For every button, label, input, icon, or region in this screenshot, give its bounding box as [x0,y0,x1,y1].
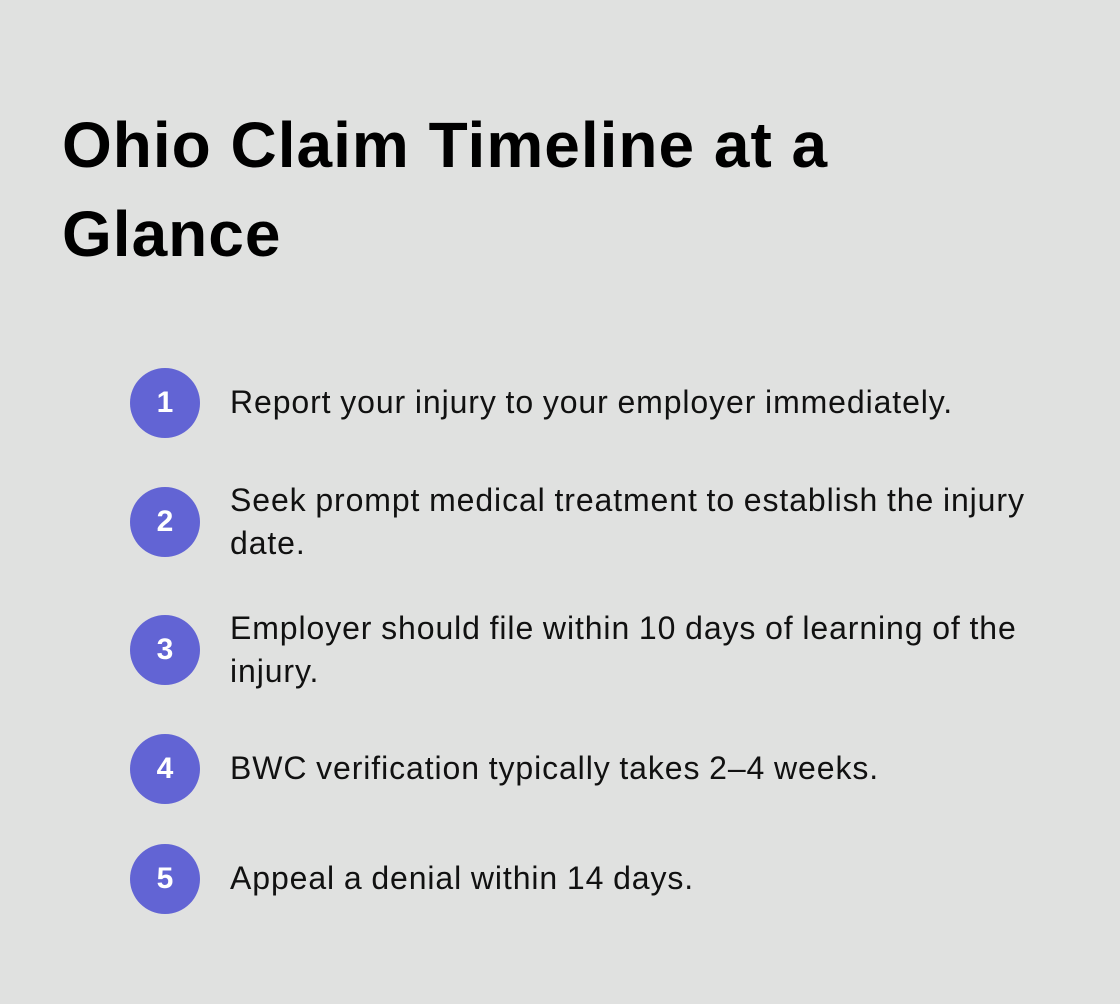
step 2: 2 [157,505,173,538]
step 5: 5 [157,862,173,895]
title: Ohio Claim Timeline at a Glance [62,109,828,270]
step 2: Seek prompt medical treatment to establish the injury date. [230,482,1025,561]
step 5 [130,844,694,914]
step 5: Appeal a denial within 14 days. [230,860,694,896]
step 4 [130,734,879,804]
step 1 [130,368,953,438]
step 4: BWC verification typically takes 2–4 weeks. [230,750,879,786]
step 1: 1 [157,386,173,419]
step 3: Employer should file within 10 days of learning of the injury. [230,610,1017,689]
step 1: Report your injury to your employer immediately. [230,384,953,420]
step 4: 4 [157,752,173,785]
step 3: 3 [157,633,173,666]
